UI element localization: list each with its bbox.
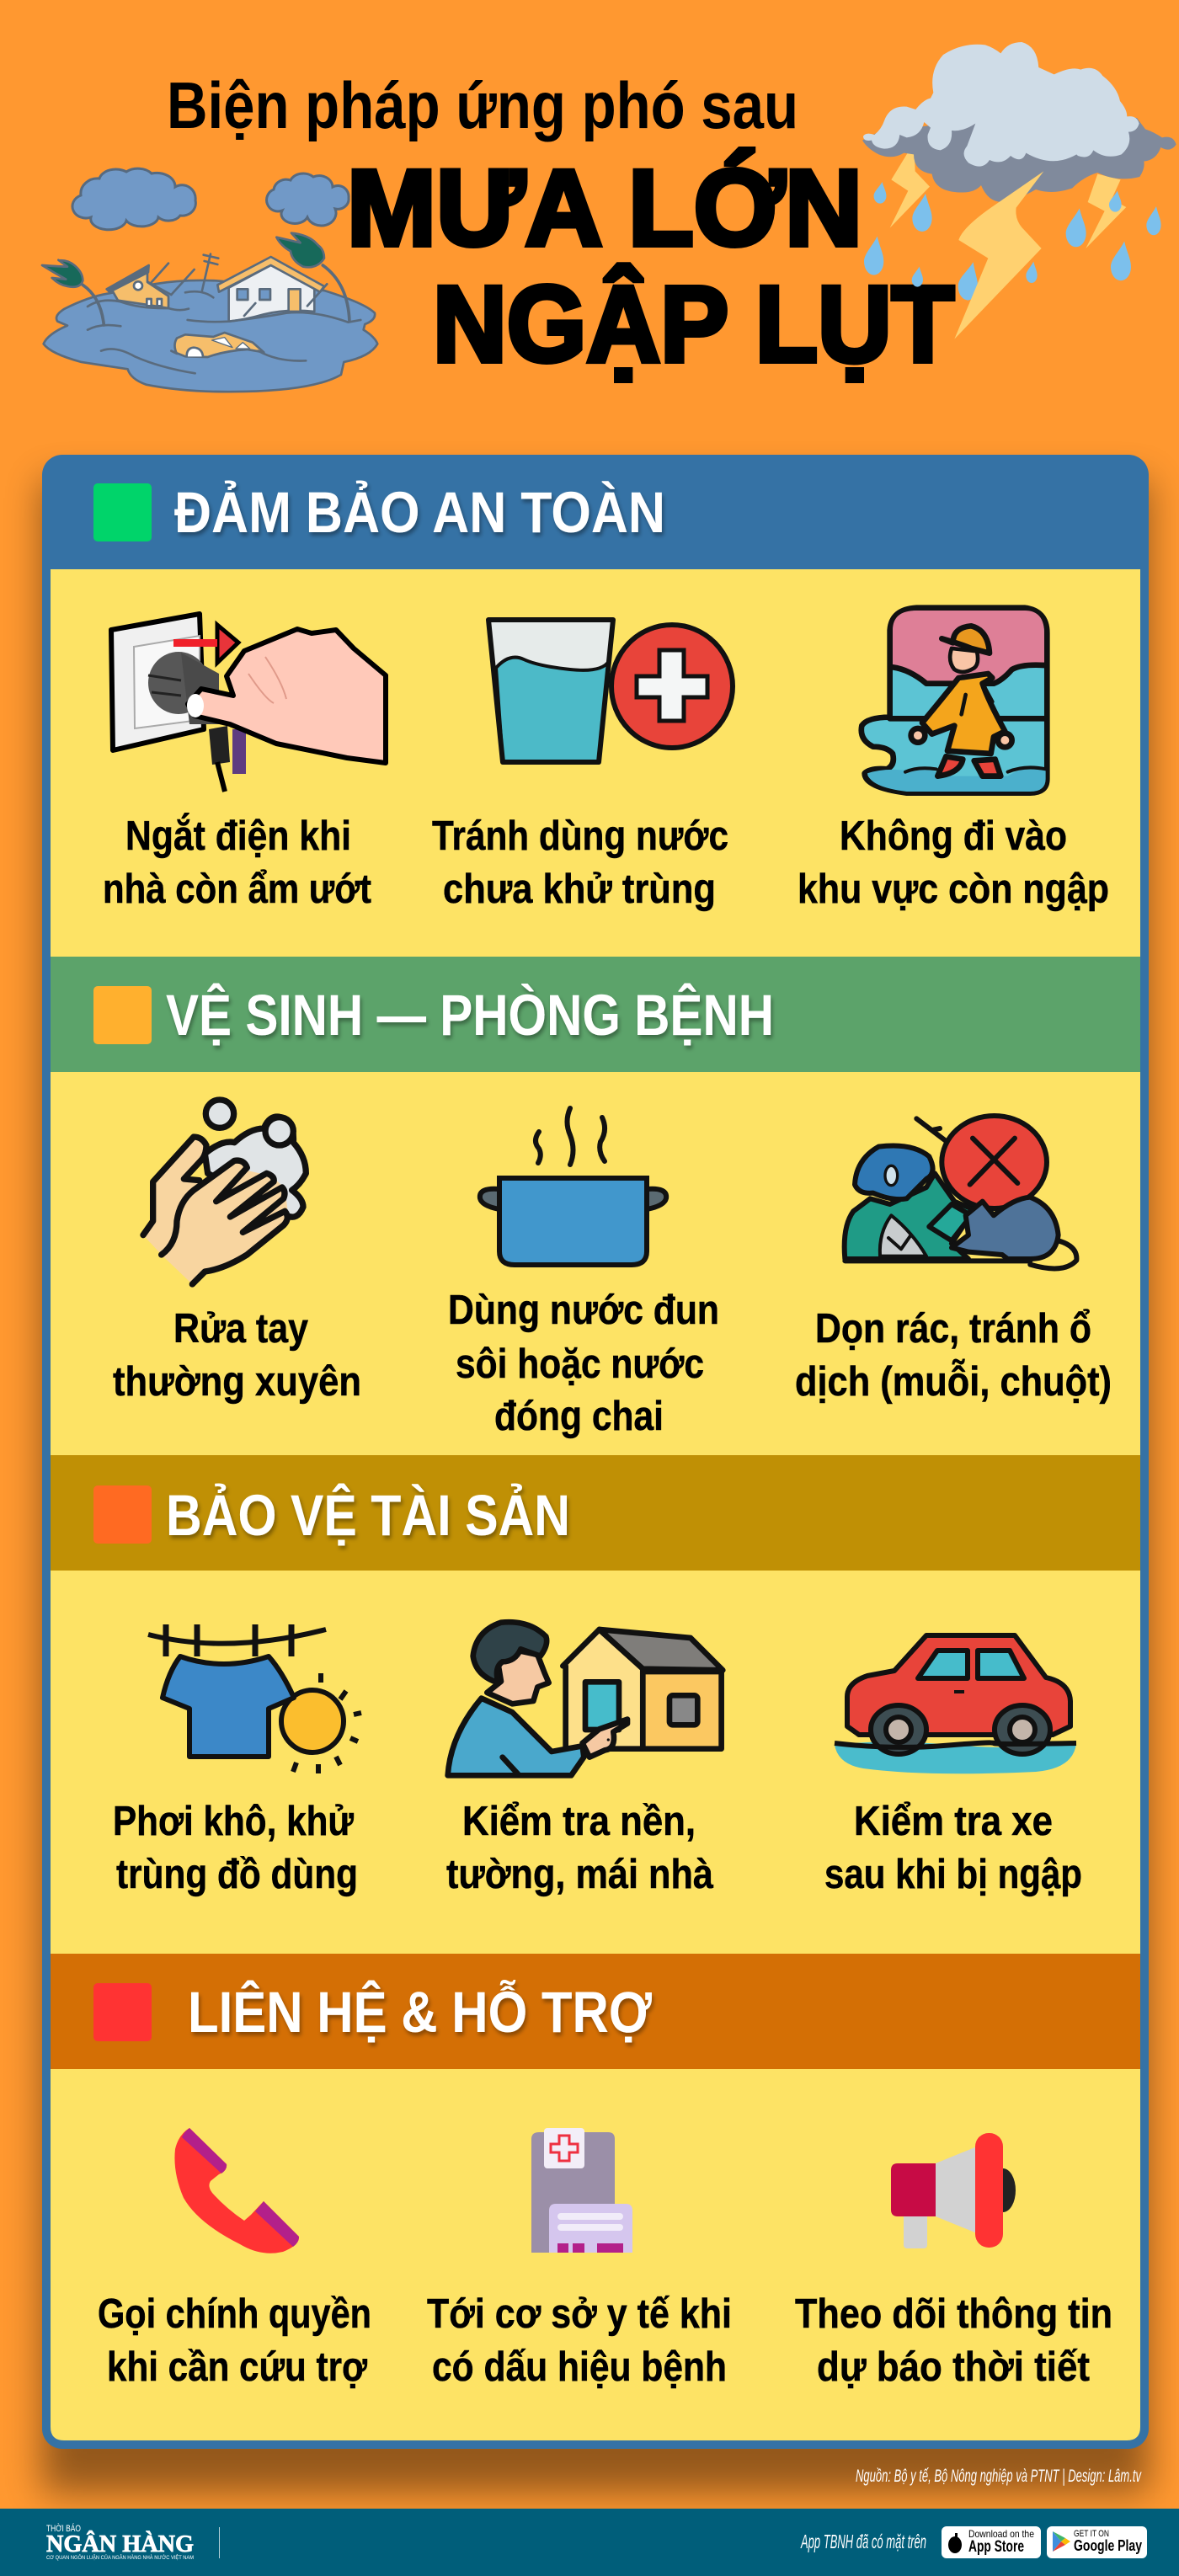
label: Kiểm tra xe: Kiểm tra xe xyxy=(854,1799,1053,1844)
label: Dùng nước đun: sôi hoặc nước xyxy=(456,1341,704,1387)
label: Rửa tay: Rửa tay xyxy=(173,1306,308,1352)
icon: man inspecting house xyxy=(448,1622,723,1775)
app promo text: App TBNH đã có mặt trên xyxy=(800,2531,926,2552)
icon: washing hands xyxy=(143,1100,306,1284)
button: Google Play: Google Play xyxy=(1074,2537,1142,2554)
label: Theo dõi thông tin: dự báo thời tiết xyxy=(817,2344,1090,2390)
illustration: flooded houses and car xyxy=(42,233,377,392)
button: Google Play xyxy=(1047,2526,1147,2558)
logo: Thời báo Ngân hàng: THỜI BÁO xyxy=(46,2523,81,2534)
title: main heading: NGẬP LỤT xyxy=(433,264,954,385)
label: Không đi vào: khu vực còn ngập xyxy=(798,867,1109,912)
label: Gọi chính quyền xyxy=(98,2291,371,2390)
button: Google Play: GET IT ON xyxy=(1074,2529,1109,2539)
icon: garbage and rat xyxy=(845,1116,1076,1268)
icon: drying shirt and sun xyxy=(148,1624,361,1773)
icon: boiling pot xyxy=(480,1108,666,1265)
label: Theo dõi thông tin: Theo dõi thông tin xyxy=(795,2291,1112,2337)
label: Theo dõi thông tin xyxy=(795,2291,1112,2390)
logo: Thời báo Ngân hàng: NGÂN HÀNG xyxy=(46,2530,194,2557)
button: App Store: App Store xyxy=(968,2538,1024,2556)
label: Rửa tay xyxy=(113,1306,361,1405)
section header: Bảo vệ tài sản: BẢO VỆ TÀI SẢN xyxy=(166,1483,570,1548)
label: Không đi vào: Không đi vào xyxy=(840,813,1067,859)
label: Gọi chính quyền: khi cần cứu trợ xyxy=(107,2344,367,2390)
label: Dọn rác xyxy=(795,1306,1112,1405)
label: Phơi khô: Phơi khô, khử xyxy=(113,1799,354,1844)
label: Tới cơ sở y tế: Tới cơ sở y tế khi xyxy=(427,2291,732,2337)
icon: unplug socket xyxy=(111,614,386,792)
label: Không đi vào xyxy=(798,813,1109,912)
illustration: storm cloud with lightning and rain xyxy=(862,42,1176,339)
label: Phơi khô xyxy=(113,1799,358,1897)
label: Phơi khô: trùng đồ dùng xyxy=(116,1852,358,1897)
illustration: small clouds xyxy=(72,168,349,230)
card shadow xyxy=(42,480,1149,2493)
icon: megaphone xyxy=(891,2133,1016,2248)
label: Tới cơ sở y tế xyxy=(427,2291,732,2390)
label: Kiểm tra nền: Kiểm tra nền, xyxy=(462,1799,696,1844)
label: Dọn rác: Dọn rác, tránh ổ xyxy=(815,1306,1091,1352)
icon: person walking in flood xyxy=(862,608,1047,793)
label: Dùng nước đun: đóng chai xyxy=(494,1394,664,1439)
label: Tránh dùng nước xyxy=(432,813,728,912)
title: main heading xyxy=(347,148,954,385)
title: main heading: MƯA LỚN xyxy=(347,148,862,269)
label: Kiểm tra nền: tường, mái nhà xyxy=(446,1852,714,1897)
label: Tránh dùng nước: Tránh dùng nước xyxy=(432,813,728,859)
label: Rửa tay: thường xuyên xyxy=(113,1359,361,1405)
label: Dùng nước đun: Dùng nước đun xyxy=(448,1288,719,1333)
icon: hospital xyxy=(531,2128,632,2253)
label: Ngắt điện: nhà còn ẩm ướt xyxy=(103,867,371,912)
section header: Vệ sinh phòng bệnh: VỆ SINH — PHÒNG BỆNH xyxy=(166,983,774,1048)
label: Tới cơ sở y tế: có dấu hiệu bệnh xyxy=(432,2344,727,2390)
icon: car in water xyxy=(835,1635,1076,1773)
footer bar xyxy=(0,2509,1179,2576)
label: Ngắt điện: Ngắt điện khi xyxy=(125,813,351,859)
logo: Thời báo Ngân hàng: CƠ QUAN NGÔN LUẬN CỦA NGÂN HÀNG NHÀ NƯỚC VIỆT NAM xyxy=(46,2553,194,2561)
panel: main card xyxy=(42,455,1149,2449)
label: Kiểm tra xe: sau khi bị ngập xyxy=(824,1852,1082,1897)
label: Ngắt điện xyxy=(103,813,371,912)
title: subtitle line: Biện pháp ứng phó sau xyxy=(167,68,798,142)
icon: water glass with medical cross xyxy=(488,620,733,762)
button: App Store xyxy=(942,2526,1041,2558)
label: Tránh dùng nước: chưa khử trùng xyxy=(443,867,716,912)
label: Gọi chính quyền: Gọi chính quyền xyxy=(98,2291,371,2337)
logo: Thời báo Ngân hàng xyxy=(46,2523,220,2561)
button: App Store: Download on the xyxy=(968,2528,1034,2540)
label: Kiểm tra xe xyxy=(824,1799,1082,1897)
icon: phone xyxy=(174,2128,299,2253)
section header: Liên hệ và hỗ trợ: LIÊN HỆ & HỖ TRỢ xyxy=(188,1980,652,2045)
label: Dùng nước đun xyxy=(448,1288,719,1439)
label: Dọn rác: dịch (muỗi, chuột) xyxy=(795,1359,1112,1405)
section header: Đảm bảo an toàn: ĐẢM BẢO AN TOÀN xyxy=(174,480,665,545)
label: Kiểm tra nền xyxy=(446,1799,714,1897)
